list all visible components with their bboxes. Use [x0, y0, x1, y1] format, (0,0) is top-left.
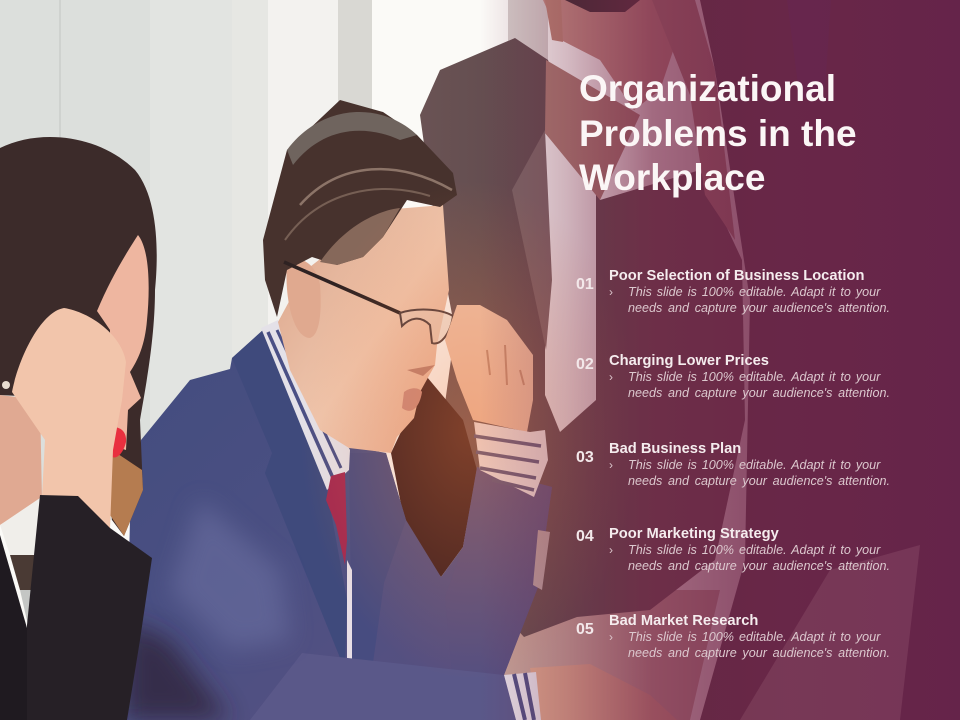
dark figure on the right: [700, 0, 960, 720]
item 05: Bad Market Research: [609, 613, 758, 629]
item 01: This slide is 100% editable. Adapt it to your: [628, 285, 880, 299]
item 04: needs and capture your audience's attention.: [628, 559, 890, 573]
item 01: [576, 268, 890, 315]
man's head: [278, 205, 449, 453]
item 05: [576, 613, 890, 660]
item 04: ›: [609, 543, 613, 557]
item 01: 01: [576, 276, 594, 293]
item 04: Poor Marketing Strategy: [609, 526, 779, 542]
item 05: needs and capture your audience's attention.: [628, 646, 890, 660]
glasses: [284, 262, 453, 343]
item 04: This slide is 100% editable. Adapt it to your: [628, 543, 880, 557]
item 05: 05: [576, 621, 594, 638]
item 02: 02: [576, 356, 594, 373]
item 04: [576, 526, 890, 573]
item 02: ›: [609, 370, 613, 384]
left woman: [0, 137, 157, 720]
item 02: needs and capture your audience's attention.: [628, 386, 890, 400]
item 02: Charging Lower Prices: [609, 353, 769, 369]
warm light overlay: [300, 180, 640, 680]
item 03: needs and capture your audience's attention.: [628, 474, 890, 488]
item 01: ›: [609, 285, 613, 299]
title: Organizational Problems in the Workplace: [579, 68, 857, 198]
item 03: ›: [609, 458, 613, 472]
item 05: This slide is 100% editable. Adapt it to your: [628, 630, 880, 644]
man's hand: [445, 305, 533, 432]
standing woman: [391, 0, 745, 720]
striped cuff: [474, 422, 548, 497]
item 01: needs and capture your audience's attention.: [628, 301, 890, 315]
item 02: [576, 353, 890, 400]
item 04: 04: [576, 528, 594, 545]
item 03: 03: [576, 449, 594, 466]
item 03: This slide is 100% editable. Adapt it to your: [628, 458, 880, 472]
item 05: ›: [609, 630, 613, 644]
item 01: Poor Selection of Business Location: [609, 268, 864, 284]
man in suit: [125, 100, 552, 720]
item 03: Bad Business Plan: [609, 441, 741, 457]
item 03: [576, 441, 890, 488]
item 02: This slide is 100% editable. Adapt it to your: [628, 370, 880, 384]
